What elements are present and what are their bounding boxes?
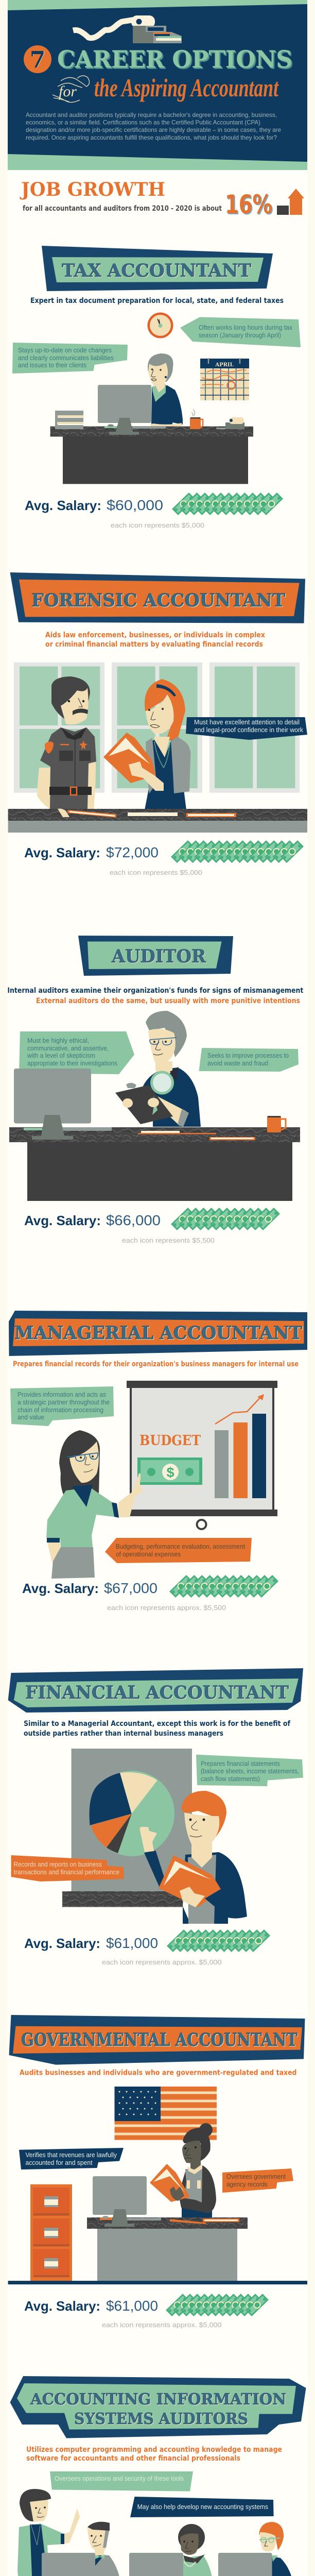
text: budget: BUDGET — [139, 1433, 201, 1449]
callout: attention to detail: Must have excellent attention to detail — [194, 719, 300, 726]
banner: AUDITOR — [111, 946, 206, 967]
panel: forensic accountant — [8, 572, 307, 876]
panel: tax accountant — [12, 246, 301, 529]
icon: money row — [169, 1575, 278, 1598]
banner — [78, 936, 233, 976]
header panel — [8, 0, 307, 170]
callout: oversees records — [222, 2168, 293, 2193]
salary: Avg. Salary: — [24, 2298, 100, 2314]
icon: clock — [147, 312, 173, 338]
panel: auditor — [7, 936, 304, 1244]
callout: code changes — [12, 343, 128, 374]
salary: $67,000 — [104, 1580, 157, 1596]
description: software for accountants and other financial professionals — [26, 2454, 240, 2463]
callout: budgeting: Budgeting, performance evaluation, assessment — [116, 1543, 245, 1550]
computer monitor — [14, 1069, 91, 1124]
banner — [10, 2376, 306, 2438]
callout: revenues: accounted for and spent — [26, 2159, 93, 2166]
governmental accountant figure — [150, 2123, 216, 2218]
icon: stapler — [216, 417, 244, 429]
callout: oversees records: Oversees government — [226, 2173, 286, 2180]
callout: financial statements — [196, 1755, 303, 1786]
managerial accountant figure — [46, 1430, 143, 1579]
salary — [24, 1208, 280, 1244]
windows — [14, 663, 300, 793]
salary: Avg. Salary: — [24, 845, 100, 860]
description — [45, 631, 265, 649]
banner: FORENSIC ACCOUNTANT — [31, 590, 285, 611]
description: Expert in tax document preparation for local, state, and federal taxes — [30, 297, 284, 305]
callout: attention to detail — [186, 717, 307, 740]
salary — [24, 2294, 269, 2329]
icon: growth arrow — [277, 189, 304, 215]
callout: strategic partner — [10, 1386, 114, 1426]
computer monitor — [98, 385, 151, 423]
floor — [8, 2281, 307, 2284]
callout: code changes: and issues to their clients — [18, 362, 86, 369]
icon: dollar bill — [137, 1458, 202, 1485]
callout: ethical — [19, 1031, 134, 1074]
callout: attention to detail: and legal-proof confidence in their work — [194, 726, 304, 734]
pie chart — [90, 1771, 174, 1856]
description — [24, 1720, 291, 1738]
computer monitor — [93, 2176, 147, 2215]
text: growth description: for all accountants and auditors from 2010 - 2020 is about — [23, 205, 222, 213]
callout: records and reports: Records and reports on business — [13, 1861, 102, 1868]
salary: each icon represents approx. $5,500 — [107, 1604, 226, 1612]
flourish: for — [52, 76, 90, 103]
callout: budgeting — [105, 1538, 252, 1563]
bar chart — [215, 1394, 266, 1498]
intro paragraph: Accountant and auditor positions typically require a bachelor's degree in accounting, business, — [26, 111, 277, 118]
banner — [9, 2015, 305, 2065]
description: outside parties rather than internal business managers — [24, 1730, 223, 1738]
callout: strategic partner: a strategic partner throughout the — [18, 1399, 110, 1406]
seated woman figure — [178, 2524, 213, 2576]
filing cabinet — [30, 2184, 72, 2281]
callout: develop systems — [130, 2497, 274, 2517]
banner: TAX ACCOUNTANT — [62, 260, 251, 281]
icon: coffee mug — [267, 1116, 286, 1132]
callout: ethical: Must be highly ethical, — [27, 1037, 89, 1044]
tax accountant figure — [148, 353, 183, 430]
stat: 16 percent: 16% — [225, 190, 272, 219]
icon: letter tray — [55, 411, 83, 429]
intro paragraph — [26, 111, 281, 141]
icon: money row — [172, 493, 283, 515]
badge: number 7 — [24, 45, 51, 73]
description: or criminal financial matters by evaluating financial records — [45, 640, 263, 649]
callout: long hours: season (January through April) — [199, 332, 281, 339]
callout: revenues — [19, 2148, 124, 2170]
banner: SYSTEMS AUDITORS — [74, 2410, 248, 2428]
callout: records and reports: transactions and financial performance — [13, 1869, 119, 1876]
callout: financial statements: cash flow statements) — [201, 1775, 260, 1783]
icon: american flag — [114, 2087, 217, 2140]
banner: ACCOUNTING INFORMATION — [30, 2391, 286, 2409]
heading: JOB GROWTH — [20, 179, 165, 200]
callout: oversees operations — [50, 2471, 193, 2492]
icon: money row — [166, 2294, 269, 2316]
callout: develop systems: May also help develop new accounting systems — [137, 2503, 268, 2511]
salary: each icon represents $5,000 — [111, 522, 204, 529]
banner — [9, 1311, 307, 1356]
icon: money row — [171, 1208, 280, 1230]
salary: $60,000 — [107, 497, 163, 513]
salary: Avg. Salary: — [22, 1581, 99, 1596]
banner — [42, 246, 273, 291]
icon: money row — [167, 1929, 270, 1952]
icon: april calendar: APRIL — [215, 362, 234, 368]
salary — [22, 1575, 278, 1612]
panel: governmental accountant — [8, 2015, 307, 2329]
intro paragraph: designation and/or more job-specific certifications are highly desirable – in some cases, they are — [26, 126, 281, 133]
icon: coffee mug — [190, 410, 203, 429]
panel: accounting information systems auditors — [10, 2376, 307, 2576]
callout: improve processes: avoid waste and fraud — [207, 1060, 268, 1067]
callout: oversees operations: Oversees operations and security of these tools — [55, 2475, 184, 2482]
mint band — [8, 0, 307, 170]
navy header field — [8, 4, 307, 162]
salary: each icon represents approx. $5,000 — [102, 1959, 222, 1966]
icon: april calendar — [200, 358, 249, 400]
salary: $61,000 — [106, 2298, 158, 2314]
panel: managerial accountant — [9, 1311, 307, 1612]
police officer figure — [37, 676, 96, 817]
callout: oversees records: agency records — [226, 2181, 268, 2188]
auditor figure — [115, 1011, 201, 1127]
salary: $72,000 — [106, 844, 159, 860]
salary: Avg. Salary: — [24, 1936, 100, 1951]
icon: typewriter with paper — [73, 15, 182, 43]
description: Aids law enforcement, businesses, or individuals in complex — [45, 631, 265, 639]
callout: ethical: communicative, and assertive, — [27, 1045, 109, 1052]
counter — [8, 809, 307, 833]
monitor stand — [109, 418, 139, 435]
keyboard and mouse — [104, 425, 166, 429]
callout: improve processes — [199, 1048, 299, 1072]
panel: financial accountant — [8, 1668, 303, 1966]
callout: ethical: appropriate to their investigations — [27, 1060, 117, 1067]
icon: dollar bill: $ — [166, 1465, 174, 1480]
callout: ethical: with a level of skepticism — [27, 1052, 95, 1059]
callout: code changes: and clearly communicates liabilities — [18, 354, 114, 362]
callout: revenues: Verifies that revenues are lawfully — [26, 2151, 117, 2159]
banner — [8, 1668, 303, 1713]
callout: strategic partner: Provides information and acts as — [18, 1391, 106, 1398]
badge: number 7: 7 — [30, 47, 45, 73]
counter — [62, 1891, 183, 1907]
salary — [24, 840, 304, 876]
financial accountant figure — [140, 1791, 247, 1924]
callout: financial statements: Prepares financial statements — [201, 1760, 280, 1767]
title: career options: CAREER OPTIONS — [57, 45, 292, 73]
callout: financial statements: (balance sheets, income statements, — [201, 1768, 299, 1775]
intro paragraph: economics, or a similar field. Certifications such as the Certified Public Accountant (CPA) — [26, 118, 260, 126]
banner — [10, 572, 305, 623]
callout: records and reports — [11, 1855, 124, 1882]
salary: each icon represents approx. $5,000 — [102, 2321, 222, 2329]
desk — [87, 2209, 248, 2281]
callout: budgeting: of operational expenses — [116, 1551, 181, 1558]
presentation board — [72, 1749, 192, 1891]
standing woman figure — [18, 2489, 80, 2576]
salary: each icon represents $5,000 — [110, 869, 202, 876]
description: Similar to a Managerial Accountant, except this work is for the benefit of — [24, 1720, 291, 1728]
description — [26, 2446, 282, 2463]
callout: strategic partner: chain of information processing — [18, 1406, 103, 1414]
salary: $61,000 — [106, 1935, 158, 1951]
description — [7, 987, 304, 1005]
banner: FINANCIAL ACCOUNTANT — [25, 1682, 289, 1703]
salary — [24, 1929, 270, 1966]
salary: each icon represents $5,500 — [122, 1237, 215, 1244]
callout: code changes: Stays up-to-date on code changes — [18, 347, 112, 354]
seated man figure — [87, 2522, 121, 2576]
computer monitors — [42, 2553, 272, 2576]
callout: long hours: Often works long hours during tax — [199, 324, 293, 331]
callout: strategic partner: and value — [18, 1414, 44, 1421]
desk — [50, 427, 253, 484]
desk — [9, 1115, 300, 1201]
salary: Avg. Salary: — [25, 498, 101, 513]
projector screen — [127, 1381, 277, 1529]
icon: money row — [171, 840, 304, 863]
intro paragraph: required. Once aspiring accountants fulfill these qualifications, what jobs should they look for? — [26, 134, 277, 141]
flourish: for: for — [59, 83, 77, 100]
seated person figure — [259, 2522, 294, 2576]
description: Utilizes computer programming and accounting knowledge to manage — [26, 2446, 282, 2454]
callout: long hours — [180, 317, 301, 347]
salary: Avg. Salary: — [24, 1213, 101, 1228]
salary: $66,000 — [106, 1212, 161, 1228]
panel: job growth — [20, 179, 304, 219]
salary — [25, 493, 283, 529]
forensic accountant figure — [103, 679, 190, 810]
banner: MANAGERIAL ACCOUNTANT — [14, 1323, 302, 1344]
callout: improve processes: Seeks to improve processes to — [207, 1052, 289, 1059]
